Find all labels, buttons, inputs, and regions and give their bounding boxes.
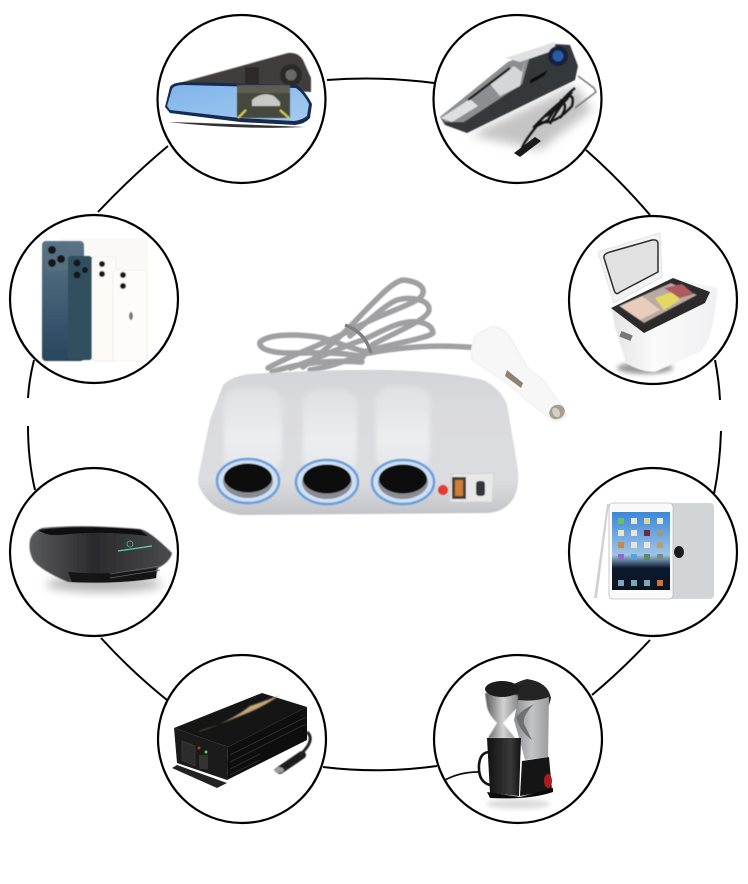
white phone small	[113, 270, 147, 361]
purifier body	[29, 526, 172, 582]
phones backdrop	[60, 238, 148, 360]
blue phone large	[42, 241, 84, 361]
device circle: air purifier	[10, 468, 178, 636]
inverter top highlight	[198, 695, 280, 732]
mirror face	[165, 82, 312, 125]
inverter side	[227, 707, 307, 780]
inverter base	[172, 765, 227, 788]
vacuum body	[440, 42, 578, 133]
coffee maker reflection	[486, 799, 550, 809]
purifier vents	[110, 566, 160, 578]
mirror shadow	[168, 122, 305, 128]
device circle: car vacuum	[434, 15, 602, 183]
inverter outlet and switch	[182, 741, 208, 769]
device circle: power inverter	[158, 655, 326, 823]
tablet back	[668, 503, 714, 599]
purifier light bar	[118, 546, 152, 551]
inverter top	[174, 693, 307, 747]
cable bundle	[260, 280, 477, 372]
vacuum shadow	[470, 85, 592, 150]
fridge lid	[598, 233, 662, 303]
socket tubes	[224, 386, 430, 474]
device circle: portable fridge	[569, 216, 737, 384]
purifier shadow	[46, 576, 162, 592]
fridge shadow	[617, 362, 673, 374]
vacuum cord	[522, 76, 596, 148]
coffee maker body top	[505, 679, 551, 705]
fridge body	[612, 278, 718, 372]
device circle: smartphones	[10, 215, 178, 383]
tablet front	[609, 503, 673, 599]
adapter body	[198, 370, 518, 515]
blue phone small	[68, 256, 92, 360]
device circle: tablet	[569, 468, 737, 636]
coffee maker cord	[445, 772, 478, 780]
coffee maker lower body	[520, 757, 552, 796]
tablet side view	[594, 504, 609, 598]
coffee funnel	[485, 693, 518, 738]
cable tie	[345, 325, 371, 353]
mirror screen	[237, 85, 290, 118]
inverter plug	[274, 732, 310, 773]
fridge handle	[619, 331, 633, 341]
device circle: coffee maker	[434, 655, 602, 823]
white phone large	[92, 257, 116, 361]
base	[487, 788, 553, 798]
vacuum plug	[514, 137, 541, 157]
coffee cup	[487, 738, 521, 796]
inverter side fins	[230, 717, 306, 775]
red LED	[438, 485, 448, 495]
car plug	[471, 327, 567, 422]
coffee maker silver panel	[514, 697, 549, 760]
inverter front	[174, 728, 228, 780]
mirror back and camera	[183, 53, 311, 92]
sockets	[217, 459, 434, 504]
cup handle	[479, 752, 490, 785]
fridge contents	[619, 283, 697, 323]
fridge opening	[611, 278, 710, 333]
coffee lid	[485, 681, 519, 697]
device circle: dash cam mirror	[158, 15, 326, 183]
USB ports	[450, 473, 494, 502]
connecting ring	[28, 79, 721, 770]
red switch	[544, 774, 552, 788]
central product: three-socket car charger	[198, 280, 567, 515]
